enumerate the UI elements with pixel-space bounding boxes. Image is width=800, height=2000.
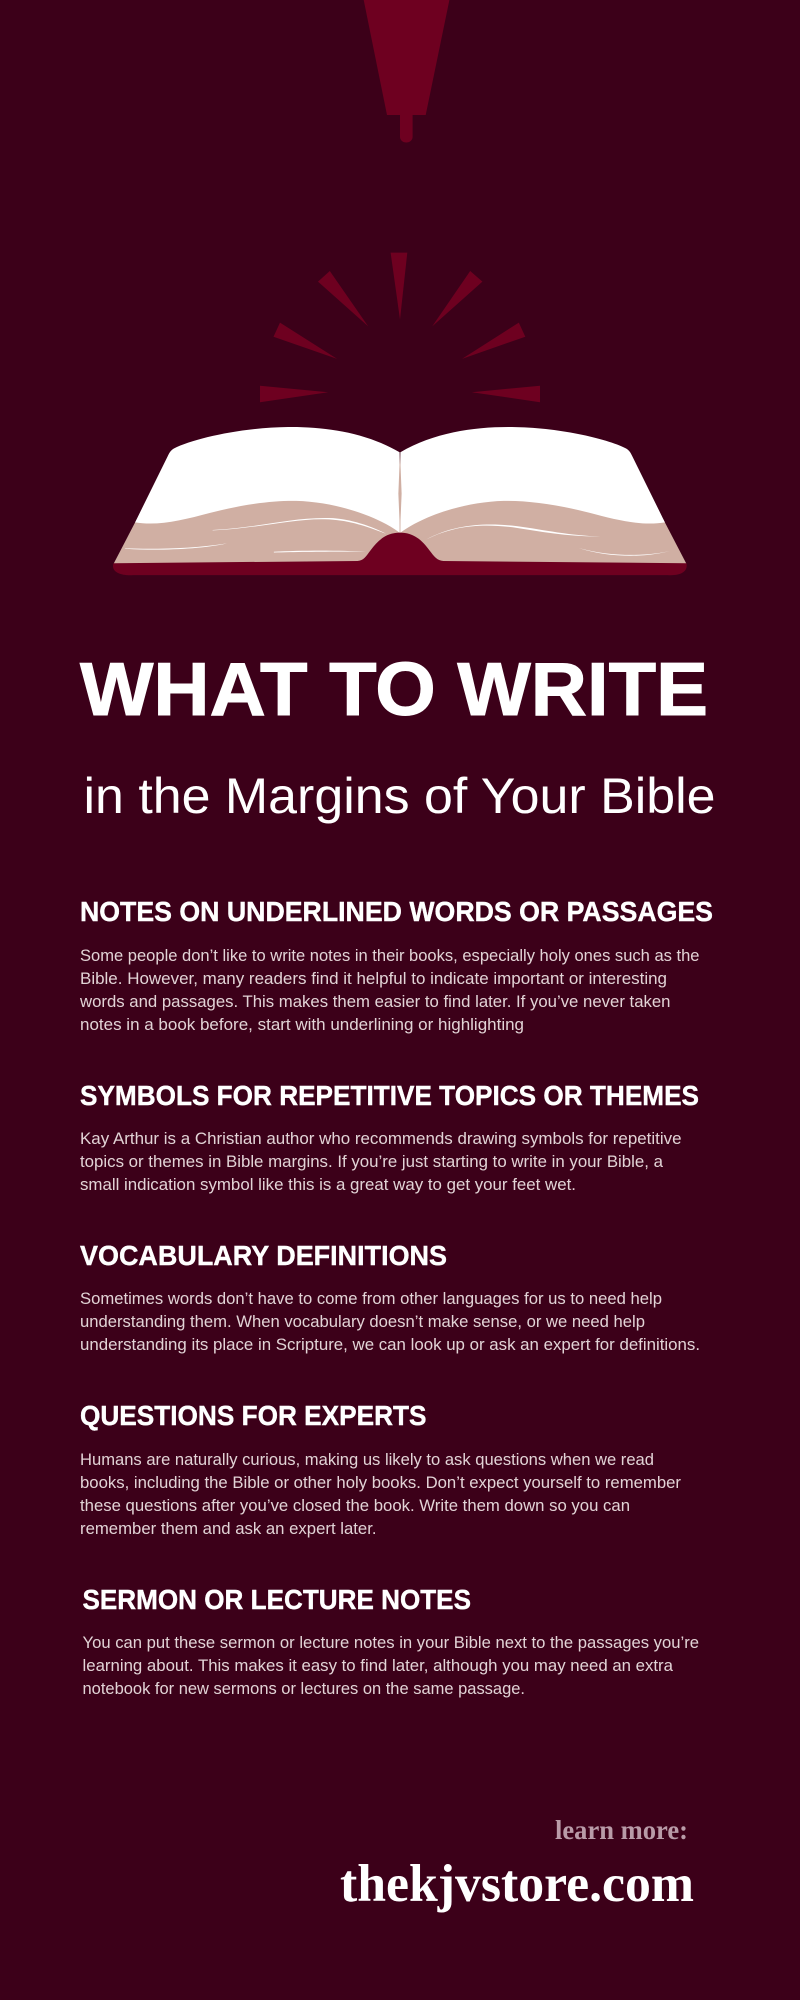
- heading: QUESTIONS FOR EXPERTS: [80, 1400, 426, 1431]
- body text: topics or themes in Bible margins. If you’re just starting to write in your Bible, a: [80, 1152, 664, 1171]
- icon: radiating rays: [260, 253, 540, 402]
- body text: notes in a book before, start with underlining or highlighting: [80, 1015, 524, 1034]
- body text: Kay Arthur is a Christian author who recommends drawing symbols for repetitive: [80, 1129, 682, 1148]
- body text: [82, 1633, 699, 1698]
- body text: Some people don’t like to write notes in their books, especially holy ones such as the: [80, 946, 700, 965]
- body text: Sometimes words don’t have to come from other languages for us to need help: [80, 1289, 662, 1308]
- footer: learn more: learn more:: [555, 1815, 688, 1845]
- body text: Humans are naturally curious, making us likely to ask questions when we read: [80, 1450, 654, 1469]
- body text: learning about. This makes it easy to find later, although you may need an extra: [82, 1656, 674, 1675]
- body text: understanding them. When vocabulary doesn’t make sense, or we need help: [80, 1312, 645, 1331]
- heading: SERMON OR LECTURE NOTES: [82, 1584, 471, 1615]
- section: vocabulary definitions: [80, 1240, 700, 1354]
- section: notes on underlined words: [79, 896, 713, 1034]
- body text: small indication symbol like this is a great way to get your feet wet.: [80, 1175, 576, 1194]
- heading: VOCABULARY DEFINITIONS: [80, 1240, 447, 1271]
- title: WHAT TO WRITE: [80, 647, 708, 731]
- body text: [80, 1289, 700, 1354]
- body text: [80, 1129, 682, 1194]
- section: questions for experts: [80, 1400, 681, 1538]
- section: sermon or lecture notes: [82, 1584, 699, 1698]
- heading: SYMBOLS FOR REPETITIVE TOPICS OR THEMES: [80, 1080, 699, 1111]
- body text: Bible. However, many readers find it helpful to indicate important or interesting: [80, 969, 667, 988]
- body text: remember them and ask an expert later.: [80, 1519, 376, 1538]
- body text: words and passages. This makes them easier to find later. If you’ve never taken: [79, 992, 671, 1011]
- icon: open book: [113, 427, 687, 575]
- body text: these questions after you’ve closed the book. Write them down so you can: [80, 1496, 630, 1515]
- heading: NOTES ON UNDERLINED WORDS OR PASSAGES: [80, 896, 713, 927]
- subtitle: in the Margins of Your Bible: [84, 768, 716, 824]
- body text: [79, 946, 700, 1034]
- footer: website: thekjvstore.com: [340, 1855, 694, 1913]
- icon: pen tip: [364, 0, 449, 142]
- body text: understanding its place in Scripture, we can look up or ask an expert for definitions.: [80, 1335, 700, 1354]
- body text: [80, 1450, 681, 1538]
- body text: books, including the Bible or other holy books. Don’t expect yourself to remember: [80, 1473, 681, 1492]
- section: symbols for repetitive topics: [80, 1080, 699, 1194]
- body text: notebook for new sermons or lectures on the same passage.: [82, 1679, 525, 1698]
- body text: You can put these sermon or lecture notes in your Bible next to the passages you’re: [82, 1633, 699, 1652]
